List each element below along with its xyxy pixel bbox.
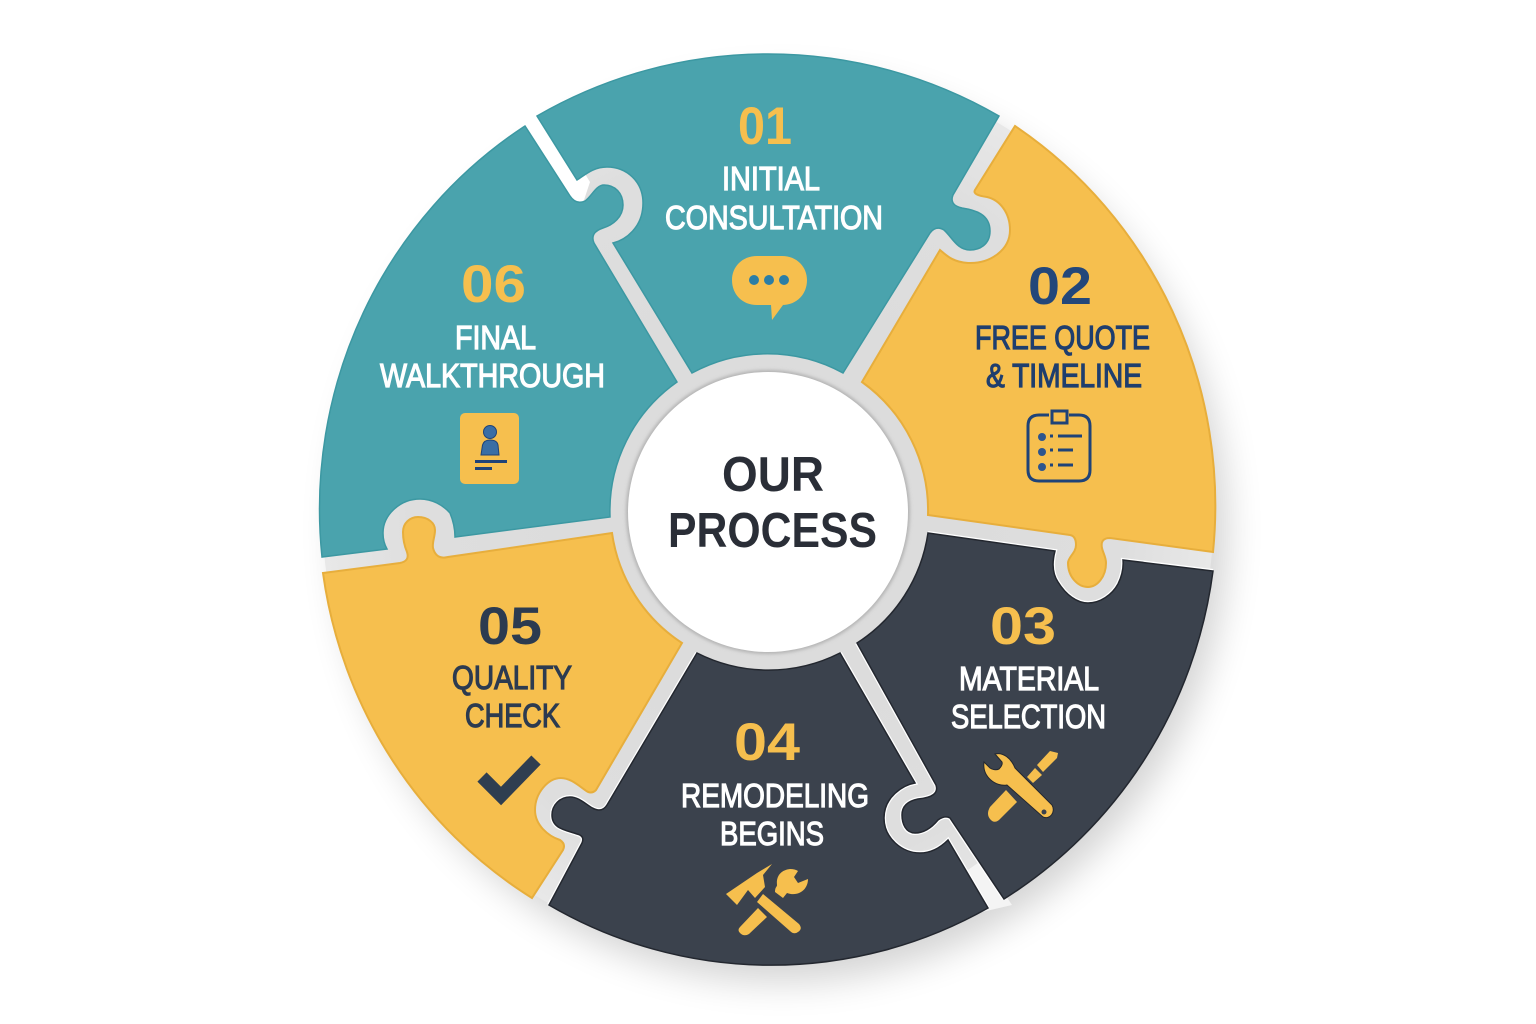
center hub bbox=[626, 370, 910, 654]
label: material selection: MATERIAL bbox=[959, 660, 1099, 697]
icon: wrench and screwdriver bbox=[984, 751, 1058, 822]
panel: step 05 quality check bbox=[323, 517, 682, 898]
label: free quote and timeline: & TIMELINE bbox=[986, 357, 1142, 394]
hub ring bbox=[626, 370, 910, 654]
label: free quote and timeline: FREE QUOTE bbox=[975, 319, 1150, 356]
hub disc bbox=[628, 372, 908, 652]
label: material selection: SELECTION bbox=[951, 698, 1106, 735]
label: material selection bbox=[951, 660, 1106, 735]
number 02: 02 bbox=[1028, 257, 1092, 316]
label: remodeling begins: BEGINS bbox=[720, 815, 824, 852]
title: our process bbox=[668, 448, 877, 558]
title: our process: PROCESS bbox=[668, 504, 877, 558]
label: remodeling begins bbox=[681, 777, 869, 852]
panel: step 01 initial consultation bbox=[537, 54, 999, 373]
puzzle piece 01 bbox=[537, 54, 999, 373]
puzzle piece 02 bbox=[862, 126, 1215, 587]
panel: step 02 free quote and timeline bbox=[862, 126, 1215, 587]
icon: profile card bbox=[460, 413, 519, 484]
puzzle piece 04 bbox=[549, 653, 988, 965]
number 05: 05 bbox=[478, 597, 542, 656]
label: quality check: QUALITY bbox=[452, 659, 572, 696]
number 01: 01 bbox=[738, 97, 792, 156]
wheel shadow bbox=[337, 78, 1227, 982]
panel: step 06 final walkthrough bbox=[320, 126, 677, 557]
title: our process: OUR bbox=[722, 448, 824, 502]
icon: hammer and wrench bbox=[726, 864, 808, 935]
number 04: 04 bbox=[734, 713, 801, 772]
wheel base disc bbox=[322, 58, 1214, 962]
number 03: 03 bbox=[990, 597, 1056, 656]
panel: step 04 remodeling begins bbox=[549, 653, 988, 965]
label: final walkthrough bbox=[380, 319, 605, 394]
label: quality check bbox=[452, 659, 572, 734]
label: final walkthrough: WALKTHROUGH bbox=[380, 357, 605, 394]
icon: speech bubble bbox=[732, 256, 807, 320]
label: initial consultation: INITIAL bbox=[722, 160, 820, 197]
icon: clipboard checklist bbox=[1028, 411, 1090, 481]
label: free quote and timeline bbox=[975, 319, 1150, 394]
puzzle piece 05 bbox=[323, 517, 682, 898]
label: initial consultation: CONSULTATION bbox=[665, 199, 883, 236]
label: final walkthrough: FINAL bbox=[455, 319, 536, 356]
panel: step 03 material selection bbox=[857, 533, 1213, 899]
puzzle piece 06 bbox=[320, 126, 677, 557]
label: initial consultation bbox=[665, 160, 883, 236]
label: quality check: CHECK bbox=[465, 697, 560, 734]
label: remodeling begins: REMODELING bbox=[681, 777, 869, 814]
puzzle piece 03 bbox=[857, 533, 1213, 899]
icon: check mark bbox=[482, 760, 536, 796]
number 06: 06 bbox=[461, 255, 526, 314]
